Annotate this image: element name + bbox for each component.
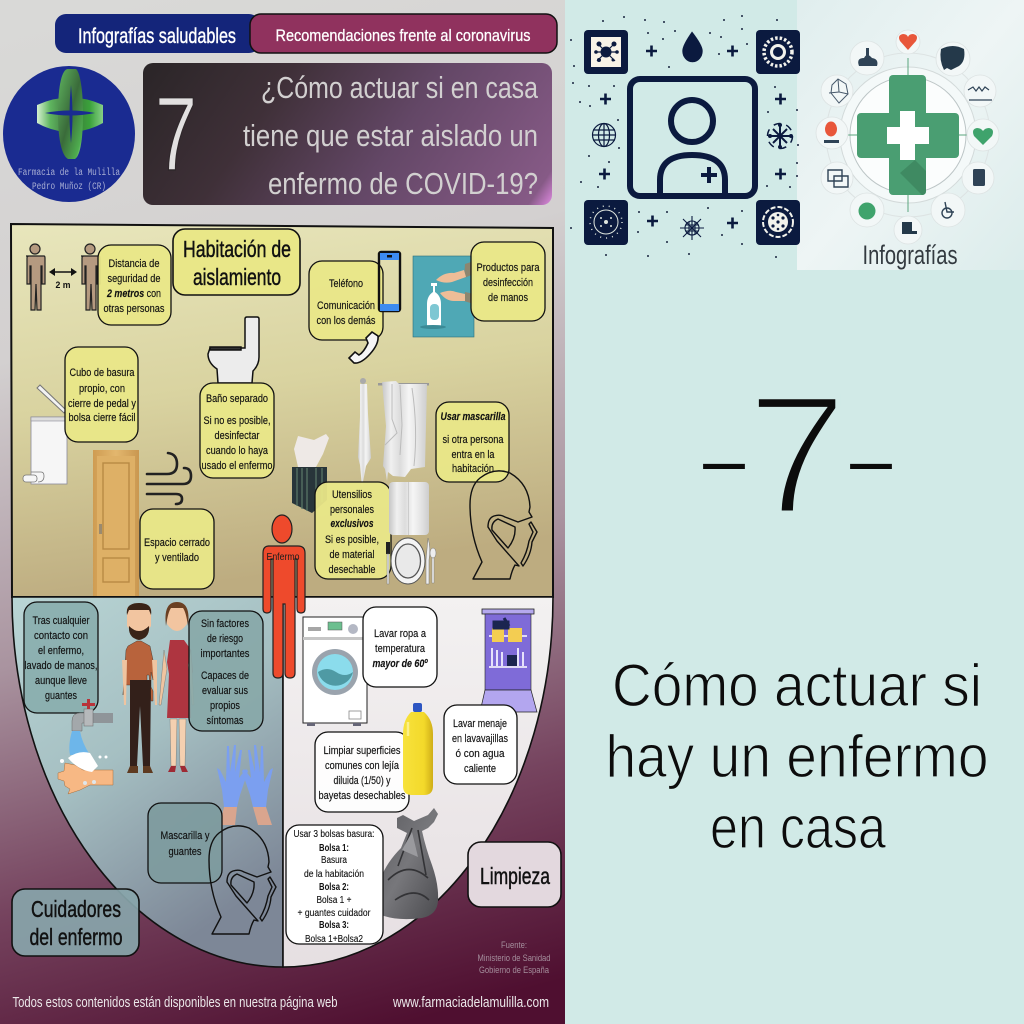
icon: two people two metres apart: 2 m — [56, 280, 70, 290]
callout: teléfono — [309, 261, 383, 340]
heading: Habitación de aislamiento: Habitación de — [183, 236, 291, 262]
callout: distancia de seguridad: seguridad de — [108, 273, 160, 285]
callout: limpiar superficies: diluida (1/50) y — [334, 775, 391, 787]
icon: red heart — [899, 34, 917, 50]
callout: cubo de basura — [65, 347, 138, 442]
headline: Cómo actuar si hay un enfermo en casa — [606, 652, 988, 861]
icon: screens — [828, 170, 848, 187]
icon: pedal bin — [23, 385, 67, 484]
callout: distancia de seguridad: otras personas — [104, 303, 165, 315]
icon: dishwasher — [480, 609, 537, 712]
icon: green medical cross — [857, 75, 959, 195]
header tab: Recomendaciones frente al coronavirus — [250, 14, 557, 53]
callout: sin factores de riesgo: Sin factores — [201, 618, 249, 630]
icon: globe — [592, 124, 616, 146]
icon: carer head with mask — [209, 826, 276, 934]
callout: lavar ropa: mayor de 60º — [372, 658, 428, 670]
icon: two people two metres apart — [26, 244, 100, 310]
callout: limpiar superficies — [315, 732, 409, 812]
icon: wheelchair — [942, 202, 954, 218]
icon: green apple — [858, 202, 876, 220]
logo: Farmacia de la Mulilla: Pedro Muñoz (CR) — [32, 181, 106, 193]
big number: -7-: 7 — [747, 360, 847, 549]
callout: lavar menaje: caliente — [464, 763, 496, 775]
source note — [478, 940, 550, 975]
callout: espacio cerrado y ventilado — [140, 509, 214, 589]
icon: wind — [147, 453, 191, 504]
callout: sin factores de riesgo: evaluar sus — [202, 685, 248, 697]
callout: bolsas de basura: de la habitación — [304, 869, 364, 880]
callout: sin factores de riesgo: Capaces de — [201, 670, 249, 682]
callout: baño separado: Baño separado — [206, 393, 268, 405]
callout: lavar ropa: Lavar ropa a — [374, 628, 427, 640]
big number: -7- — [696, 360, 900, 549]
icon: truck — [902, 222, 917, 234]
callout: utensilios personales: personales — [330, 504, 374, 516]
title question: enfermo de COVID-19? — [268, 166, 538, 201]
title banner — [143, 63, 552, 205]
title question: ¿Cómo actuar si en casa — [261, 70, 539, 105]
panel: Cuidadores del enfermo — [12, 597, 283, 967]
icon: blue gloves — [217, 745, 273, 825]
callout: usar mascarilla: Usar mascarilla — [440, 411, 506, 423]
callout: limpiar superficies: comunes con lejía — [325, 760, 400, 772]
icon: washing machine — [303, 617, 367, 726]
icon group: patient in frame with virus tiles — [570, 15, 800, 258]
callout: lavar menaje: ó con agua — [456, 748, 505, 760]
callout: productos para desinfección: de manos — [488, 292, 528, 304]
icon: drop — [682, 31, 703, 63]
callout: lavado de manos: aunque lleve — [35, 675, 87, 687]
figure: Enfermo: Enfermo — [266, 552, 300, 563]
headline: Cómo actuar si hay un enfermo en casa: en casa — [710, 794, 887, 861]
callout: lavado de manos: guantes — [45, 690, 77, 702]
orbit icon bubbles — [816, 30, 999, 244]
callout: bolsas de basura: Basura — [321, 855, 347, 866]
callout: teléfono: Teléfono — [329, 278, 363, 290]
callout: cubo de basura: cierre de pedal y — [68, 398, 136, 410]
source note: Gobierno de España — [479, 965, 549, 975]
heading: Cuidadores del enfermo — [12, 889, 139, 956]
heading: Habitación de aislamiento: aislamiento — [193, 264, 281, 290]
callout: lavar ropa: temperatura — [375, 643, 426, 655]
big number: -7-: - — [696, 424, 752, 498]
callout: bolsas de basura: Usar 3 bolsas basura: — [294, 829, 374, 840]
illustration: woman — [159, 602, 194, 772]
callout: distancia de seguridad: Distancia de — [108, 258, 160, 270]
callout: baño separado: desinfectar — [214, 430, 260, 442]
header tab: Recomendaciones frente al coronavirus: Recomendaciones frente al coronavirus — [276, 26, 530, 45]
icon: toilet — [208, 317, 259, 383]
illustration: man — [122, 603, 157, 773]
icon: rubbish bag — [376, 808, 438, 919]
icon: telephone handset — [349, 332, 378, 363]
footer url: www.farmaciadelamulilla.com — [392, 994, 549, 1011]
callout: baño separado — [200, 383, 274, 478]
callout: lavar menaje: en lavavajillas — [452, 733, 508, 745]
heading: Cuidadores del enfermo: Cuidadores — [31, 896, 121, 922]
label: Infografías: Infografías — [862, 240, 958, 270]
callout: mascarilla y guantes — [148, 803, 222, 883]
callout: lavar ropa — [363, 607, 437, 687]
callout: sin factores de riesgo — [189, 611, 263, 731]
callout: baño separado: Si no es posible, — [204, 415, 270, 427]
callout: bolsas de basura: + guantes cuidador — [298, 908, 371, 919]
callout: productos para desinfección — [471, 242, 545, 321]
callout: productos para desinfección: Productos para — [476, 262, 540, 274]
icon: paper rolls — [389, 482, 429, 535]
callout: usar mascarilla: si otra persona — [442, 434, 504, 446]
scattered dots — [570, 15, 799, 258]
icon: virus tile top right — [756, 30, 800, 74]
icon: clipboard — [973, 169, 985, 186]
callout: bolsas de basura — [286, 825, 383, 945]
icon: plate and cutlery — [386, 538, 436, 584]
callout: teléfono: Comunicación — [317, 300, 375, 312]
headline: Cómo actuar si hay un enfermo en casa: Cómo actuar si — [612, 652, 982, 719]
callout: lavado de manos: el enfermo, — [38, 645, 84, 657]
callout: baño separado: usado el enfermo — [202, 460, 272, 472]
header tab: Infografías saludables: Infografías saludables — [78, 25, 236, 48]
callout: cubo de basura: bolsa cierre fácil — [68, 412, 136, 424]
callout: usar mascarilla — [436, 402, 509, 482]
heading: Cuidadores del enfermo: del enfermo — [30, 924, 122, 950]
callout: utensilios personales: desechable — [328, 564, 376, 576]
callout: lavado de manos: Tras cualquier — [32, 615, 90, 627]
icon: tissue box — [292, 434, 329, 513]
callout: limpiar superficies: Limpiar superficies — [324, 745, 401, 757]
icon: person frame — [630, 79, 755, 196]
callout: usar mascarilla: entra en la — [452, 449, 495, 461]
big number: -7-: - — [842, 424, 900, 498]
plus signs — [599, 46, 786, 228]
icon: head with mask — [470, 471, 537, 579]
callout: lavado de manos: contacto con — [34, 630, 88, 642]
callout: bolsas de basura: Bolsa 1: — [319, 843, 349, 854]
callout: usar mascarilla: habitación — [452, 463, 494, 475]
callout: utensilios personales — [315, 482, 391, 579]
icon: virus right — [768, 123, 793, 149]
icon: virus bottom — [680, 216, 704, 240]
callout: sin factores de riesgo: síntomas — [206, 715, 244, 727]
callout: lavar menaje — [444, 705, 517, 784]
callout: distancia de seguridad: 2 metros con — [106, 288, 161, 300]
icon: virus tile top left — [584, 30, 628, 74]
source note: Ministerio de Sanidad — [478, 953, 550, 963]
callout: sin factores de riesgo: de riesgo — [207, 633, 243, 645]
callout: utensilios personales: Utensilios — [332, 489, 372, 501]
callout: bolsas de basura: Bolsa 1+Bolsa2 — [305, 934, 363, 945]
callout: utensilios personales: de material — [330, 549, 374, 561]
callout: espacio cerrado y ventilado: Espacio cerrado — [144, 537, 210, 549]
panel: Infografías logo — [797, 0, 1024, 270]
panel: Limpieza — [283, 597, 561, 967]
callout: lavado de manos — [24, 602, 98, 713]
icon: mobile phone — [379, 252, 400, 311]
callout: cubo de basura: Cubo de basura — [70, 367, 135, 379]
footer note: Todos estos contenidos están disponibles en nuestra página web — [12, 994, 338, 1011]
heading: Habitación de aislamiento — [173, 229, 300, 295]
icon: virus tile bottom left — [584, 200, 628, 245]
title question — [243, 70, 539, 201]
callout: sin factores de riesgo: propios — [210, 700, 240, 712]
callout: utensilios personales: exclusivos — [330, 518, 374, 530]
callout: mascarilla y guantes: guantes — [168, 846, 202, 858]
icon: network — [829, 79, 848, 103]
icon: hanging towels — [358, 378, 429, 487]
title question: tiene que estar aislado un — [243, 118, 538, 153]
source note: Fuente: — [501, 940, 527, 950]
icon: cloud node — [858, 48, 877, 66]
icon: tap and washing hands — [58, 699, 113, 794]
callout: mascarilla y guantes: Mascarilla y — [160, 830, 210, 842]
callout: productos para desinfección: desinfección — [483, 277, 533, 289]
icon: pulse line — [968, 87, 992, 100]
icon: hand sanitizer — [413, 256, 474, 337]
icon: door — [93, 450, 139, 596]
callout: distancia de seguridad — [98, 245, 171, 325]
heading: Limpieza: Limpieza — [480, 863, 550, 889]
panel: left poster background — [0, 0, 565, 1024]
header tab: Infografías saludables — [55, 14, 260, 53]
figure: Enfermo — [263, 515, 305, 678]
icon: dark shield — [940, 46, 964, 70]
icon: orange badge — [824, 122, 839, 143]
callout: lavado de manos: lavado de manos, — [24, 660, 98, 672]
panel: right background — [565, 0, 1024, 1024]
callout: bolsas de basura: Bolsa 3: — [319, 920, 349, 931]
icon: green heart — [973, 128, 993, 145]
orbit rings — [826, 53, 990, 217]
callout: limpiar superficies: bayetas desechables — [318, 790, 406, 802]
callout: teléfono: con los demás — [316, 315, 376, 327]
callout: espacio cerrado y ventilado: y ventilado — [155, 552, 199, 564]
callout: cubo de basura: propio, con — [79, 383, 125, 395]
callout: bolsas de basura: Bolsa 2: — [319, 882, 349, 893]
icon: virus tile bottom right — [756, 200, 800, 245]
callout: sin factores de riesgo: importantes — [200, 648, 250, 660]
callout: bolsas de basura: Bolsa 1 + — [316, 895, 352, 906]
logo: Farmacia de la Mulilla: Farmacia de la Mulilla — [18, 167, 120, 179]
panel: Habitación de aislamiento room — [11, 224, 553, 597]
headline: Cómo actuar si hay un enfermo en casa: hay un enfermo — [606, 723, 988, 790]
icon: bleach bottle — [403, 703, 433, 795]
callout: baño separado: cuando lo haya — [206, 445, 269, 457]
callout: lavar menaje: Lavar menaje — [453, 718, 507, 730]
logo: Farmacia de la Mulilla — [3, 66, 135, 202]
heading: Limpieza — [468, 842, 561, 907]
title number 7: 7 — [155, 76, 197, 193]
callout: utensilios personales: Si es posible, — [325, 534, 379, 546]
